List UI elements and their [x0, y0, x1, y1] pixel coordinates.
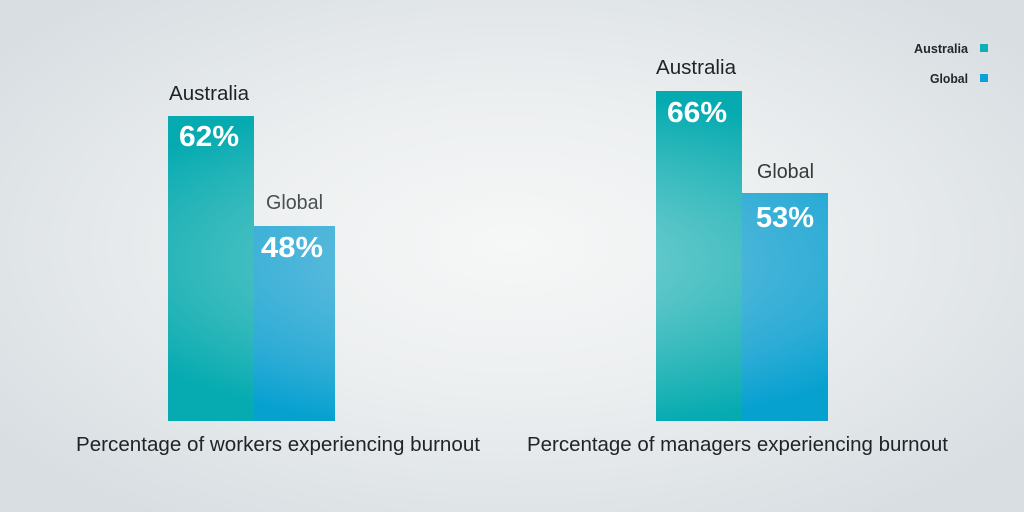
caption: managers: Percentage of managers experiencing burnout	[527, 434, 948, 456]
label: Global: Global	[266, 192, 323, 214]
bar: Global managers 53%	[742, 193, 828, 421]
bar: Australia managers 66%	[656, 91, 742, 421]
value: 66%: 66%	[667, 97, 727, 129]
value: 53%: 53%	[756, 202, 814, 234]
caption: workers: Percentage of workers experiencing burnout	[76, 434, 480, 456]
chart: workers experiencing burnout	[76, 83, 480, 456]
legend item: Global: Global	[930, 71, 968, 86]
bar: Global workers 48%	[254, 226, 335, 421]
value: 62%: 62%	[179, 121, 239, 153]
label: Australia: Australia	[656, 57, 737, 79]
label: Global: Global	[757, 161, 814, 183]
label: Australia: Australia	[169, 83, 250, 105]
legend	[914, 41, 988, 86]
bar: Australia workers 62%	[168, 116, 254, 421]
value: 48%: 48%	[261, 232, 323, 264]
chart: managers experiencing burnout	[527, 57, 948, 456]
legend item: Australia: Australia	[914, 41, 969, 56]
